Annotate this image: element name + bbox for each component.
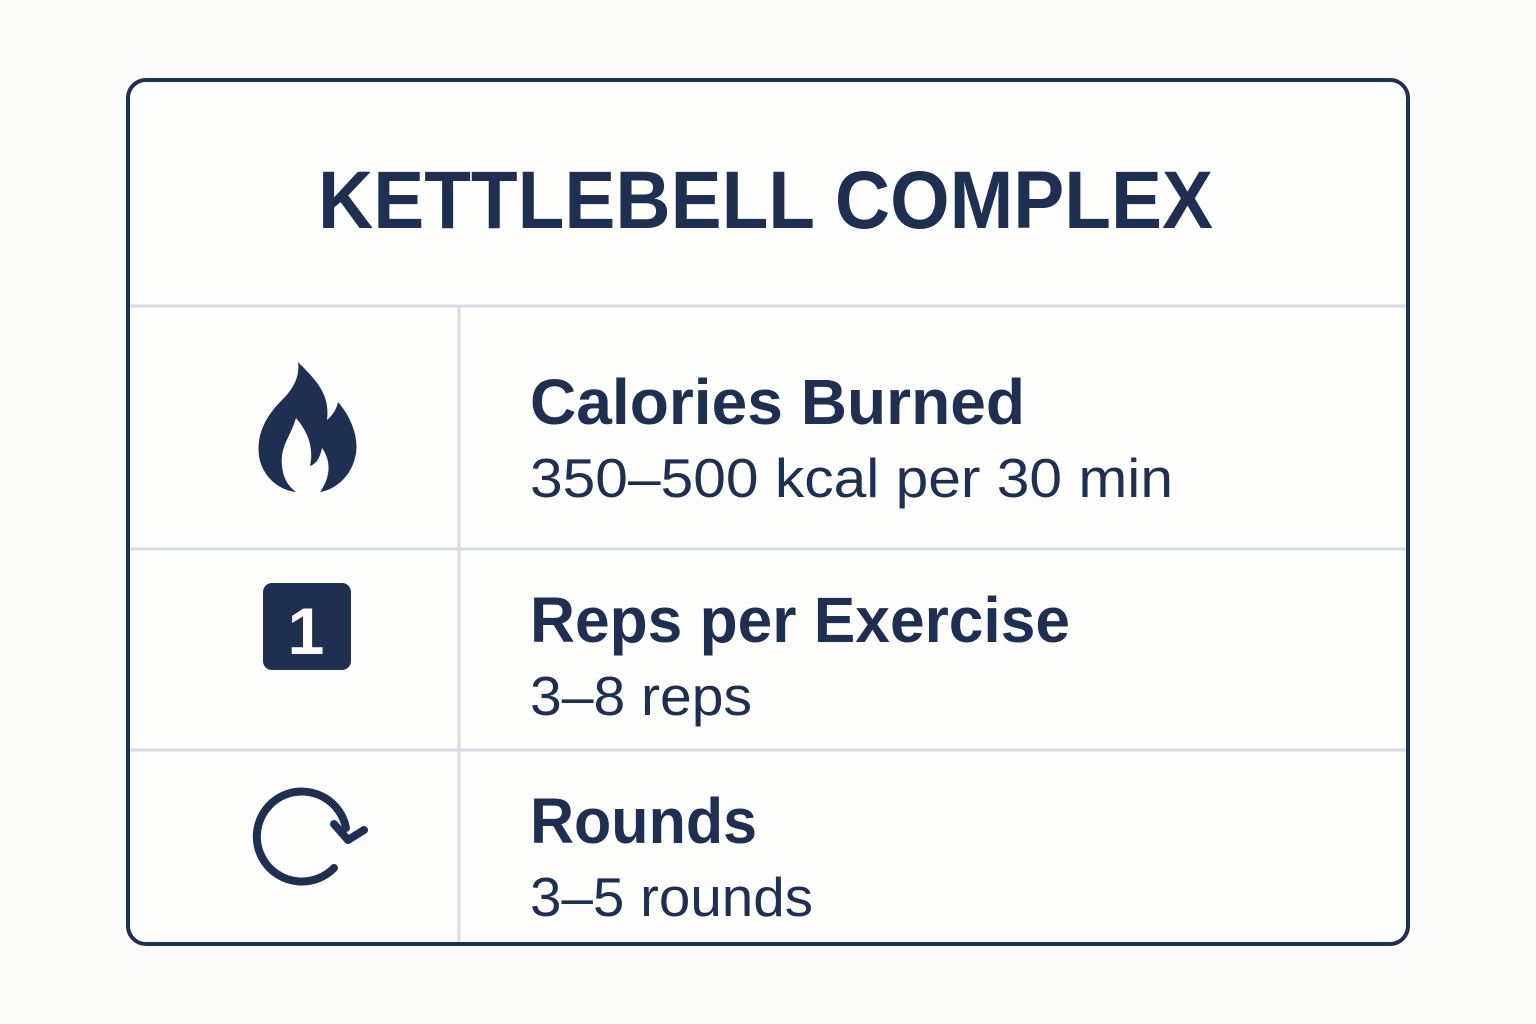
row 1 text: Calories Burned <box>530 366 1025 438</box>
row 2 text: Reps per Exercise <box>530 584 1070 656</box>
row 3 text: 3–5 rounds <box>530 866 813 928</box>
title: KETTLEBELL COMPLEX <box>318 155 1213 246</box>
panel: card <box>128 80 1408 944</box>
row 1 text: 350–500 kcal per 30 min <box>530 447 1173 509</box>
icon: number 1 <box>263 583 351 670</box>
icon: flame <box>259 362 356 492</box>
row 1 text <box>530 366 1173 509</box>
icon: number 1: 1 <box>288 594 324 668</box>
row 2 text: 3–8 reps <box>530 665 752 727</box>
row 3 text: Rounds <box>530 785 757 857</box>
row 3 text <box>530 785 813 928</box>
row 2 text <box>530 584 1070 727</box>
icon: repeat arrow <box>257 792 364 882</box>
